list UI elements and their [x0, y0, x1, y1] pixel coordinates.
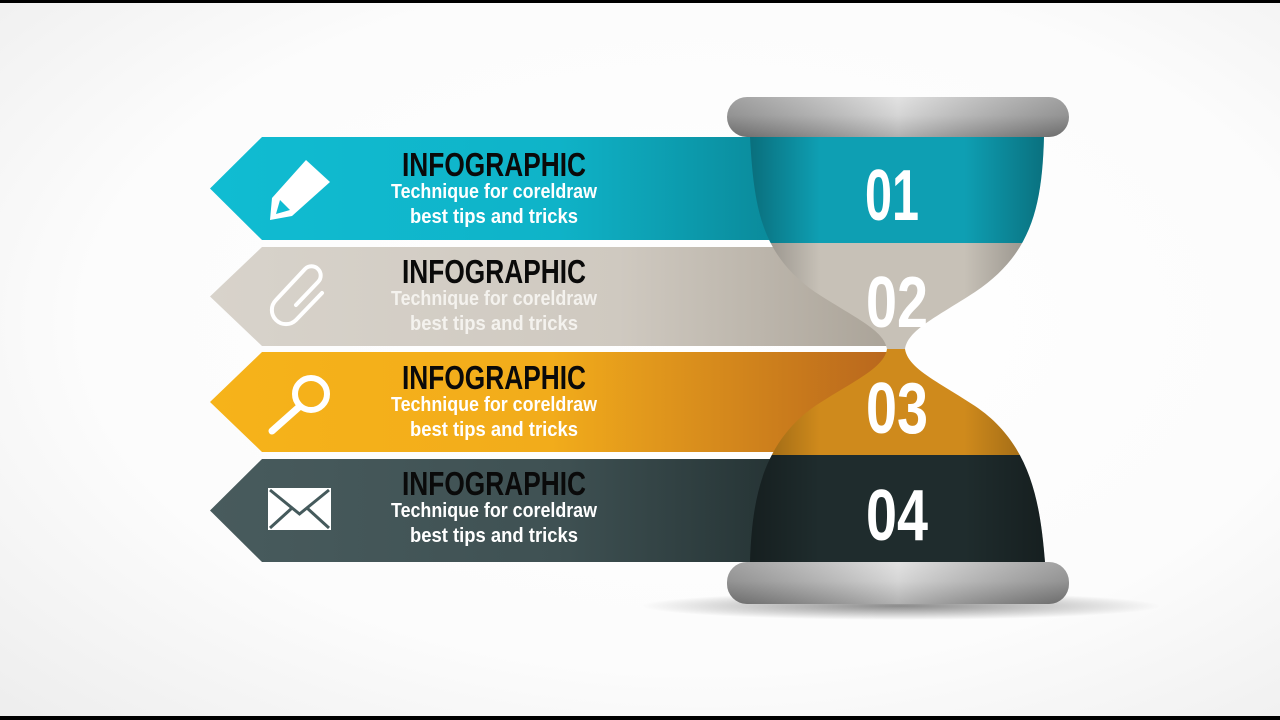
number 01: 01 [865, 156, 919, 236]
banner 3 [210, 352, 892, 452]
icon: envelope [268, 488, 331, 530]
heading 1: INFOGRAPHIC [402, 146, 586, 183]
text 1: Technique for coreldraw [391, 181, 597, 203]
text 2: Technique for coreldraw [391, 288, 597, 310]
banner 3: best tips and tricks [410, 419, 578, 441]
icon: magnifier [272, 378, 327, 431]
banner 1: best tips and tricks [410, 206, 578, 228]
text 3: Technique for coreldraw [391, 394, 597, 416]
heading 4: INFOGRAPHIC [402, 465, 586, 502]
number 04: 04 [866, 476, 928, 556]
glass body [740, 137, 1060, 562]
top cap [727, 97, 1069, 137]
icon: paperclip [272, 266, 322, 324]
banner 4: best tips and tricks [410, 525, 578, 547]
heading 3: INFOGRAPHIC [402, 359, 586, 396]
text 4: Technique for coreldraw [391, 500, 597, 522]
number 03: 03 [866, 369, 928, 449]
heading 2: INFOGRAPHIC [402, 253, 586, 290]
banner 4 [210, 459, 790, 562]
banner 1 [210, 137, 790, 240]
banner 2: best tips and tricks [410, 313, 578, 335]
shadow under hourglass [640, 592, 1160, 620]
hourglass [727, 97, 1069, 604]
banner 2 [210, 247, 892, 346]
number 02: 02 [866, 263, 928, 343]
icon: pencil [270, 160, 330, 220]
bottom cap [727, 562, 1069, 604]
